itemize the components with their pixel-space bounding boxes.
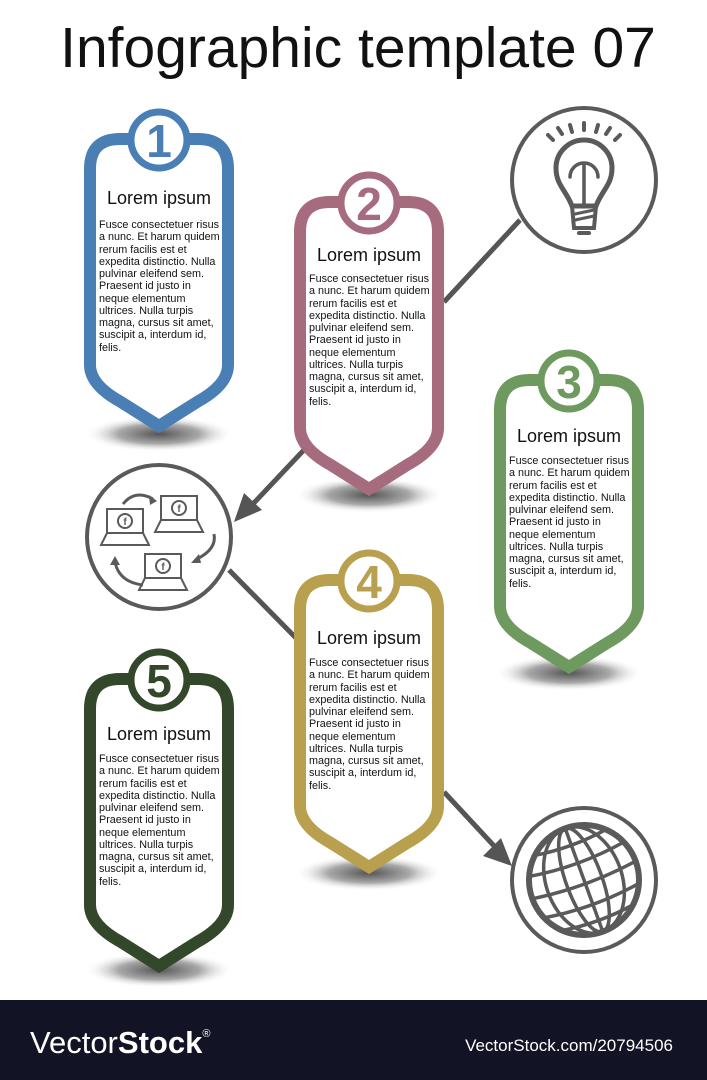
pin 2 — [294, 175, 444, 513]
pin 2: ultrices. Nulla turpis — [309, 359, 404, 371]
pin 4: felis. — [309, 780, 331, 792]
pin 3: expedita distinctio. Nulla — [509, 492, 625, 504]
pin 5: rerum facilis est et — [99, 778, 187, 790]
pin 2: magna, cursus sit amet, — [309, 371, 424, 383]
pin 4: ultrices. Nulla turpis — [309, 743, 404, 755]
pin 1: a nunc. Et harum quidem — [99, 231, 220, 243]
pin 1: neque elementum — [99, 293, 185, 305]
pin 5: Praesent id justo in — [99, 814, 191, 826]
pin 5: felis. — [99, 876, 121, 888]
icon: network of laptops: f — [177, 504, 181, 515]
pin 5 — [84, 652, 234, 988]
pin 1: suscipit a, interdum id, — [99, 329, 206, 341]
pin 1: Fusce consectetuer risus — [99, 219, 220, 231]
pin 2: Praesent id justo in — [309, 334, 401, 346]
pin 3: neque elementum — [509, 529, 595, 541]
pin 2: Fusce consectetuer risus — [309, 273, 430, 285]
pin 2: a nunc. Et harum quidem — [309, 285, 430, 297]
pin 5: Lorem ipsum — [107, 724, 211, 744]
pin 3: ultrices. Nulla turpis — [509, 541, 604, 553]
connector lines — [229, 220, 520, 848]
pin 1: Lorem ipsum — [107, 188, 211, 208]
icon: light bulb — [512, 108, 656, 252]
pin 3: rerum facilis est et — [509, 480, 597, 492]
footer — [0, 1000, 707, 1080]
pin 5: 5 — [146, 655, 172, 707]
pin 5: expedita distinctio. Nulla — [99, 790, 215, 802]
pin 1: ultrices. Nulla turpis — [99, 305, 194, 317]
pin 5: pulvinar eleifend sem. — [99, 802, 204, 814]
pin 3: Lorem ipsum — [517, 426, 621, 446]
pin 3: Fusce consectetuer risus — [509, 455, 630, 467]
pin 5: neque elementum — [99, 827, 185, 839]
pin 3: felis. — [509, 578, 531, 590]
arrow heads — [234, 493, 512, 866]
pin 1: magna, cursus sit amet, — [99, 317, 214, 329]
pin 5: magna, cursus sit amet, — [99, 851, 214, 863]
pin 1: felis. — [99, 342, 121, 354]
pin 4: rerum facilis est et — [309, 682, 397, 694]
pin 2: Lorem ipsum — [317, 245, 421, 265]
pin 1: pulvinar eleifend sem. — [99, 268, 204, 280]
pin 2: neque elementum — [309, 347, 395, 359]
pin 4: a nunc. Et harum quidem — [309, 669, 430, 681]
title: Infographic template 07 — [60, 16, 656, 80]
icon: network of laptops — [87, 465, 231, 609]
pin 4: pulvinar eleifend sem. — [309, 706, 414, 718]
pin 2: felis. — [309, 396, 331, 408]
pin 3: Praesent id justo in — [509, 516, 601, 528]
pin 4: neque elementum — [309, 731, 395, 743]
pin 2: pulvinar eleifend sem. — [309, 322, 414, 334]
pin 4: magna, cursus sit amet, — [309, 755, 424, 767]
pin 5: ultrices. Nulla turpis — [99, 839, 194, 851]
footer: VectorStock.com/20794506 — [465, 1036, 673, 1055]
pin 4: Praesent id justo in — [309, 718, 401, 730]
pin 3: a nunc. Et harum quidem — [509, 467, 630, 479]
pin 4: suscipit a, interdum id, — [309, 767, 416, 779]
pin 3: 3 — [556, 356, 582, 408]
icon: network of laptops: f — [161, 562, 165, 573]
pin 1: rerum facilis est et — [99, 244, 187, 256]
pin 3: pulvinar eleifend sem. — [509, 504, 614, 516]
pin 4: Lorem ipsum — [317, 628, 421, 648]
footer: VectorStock — [30, 1025, 202, 1060]
footer: ® — [202, 1028, 210, 1040]
icon: globe — [512, 808, 656, 952]
pin 1 — [84, 112, 234, 452]
pin 5: Fusce consectetuer risus — [99, 753, 220, 765]
pin 3: magna, cursus sit amet, — [509, 553, 624, 565]
pin 2: rerum facilis est et — [309, 298, 397, 310]
pin 3 — [494, 353, 644, 691]
pin 1: 1 — [146, 115, 172, 167]
pin 2: expedita distinctio. Nulla — [309, 310, 425, 322]
pin 4: Fusce consectetuer risus — [309, 657, 430, 669]
pin 2: 2 — [356, 178, 382, 230]
icon: network of laptops: f — [123, 517, 127, 528]
pin 4: expedita distinctio. Nulla — [309, 694, 425, 706]
pin 1: Praesent id justo in — [99, 280, 191, 292]
pin 2: suscipit a, interdum id, — [309, 383, 416, 395]
pin 5: suscipit a, interdum id, — [99, 863, 206, 875]
pin 4 — [294, 553, 444, 891]
pin 3: suscipit a, interdum id, — [509, 565, 616, 577]
pin 4: 4 — [356, 556, 382, 608]
pin 5: a nunc. Et harum quidem — [99, 765, 220, 777]
pin 1: expedita distinctio. Nulla — [99, 256, 215, 268]
